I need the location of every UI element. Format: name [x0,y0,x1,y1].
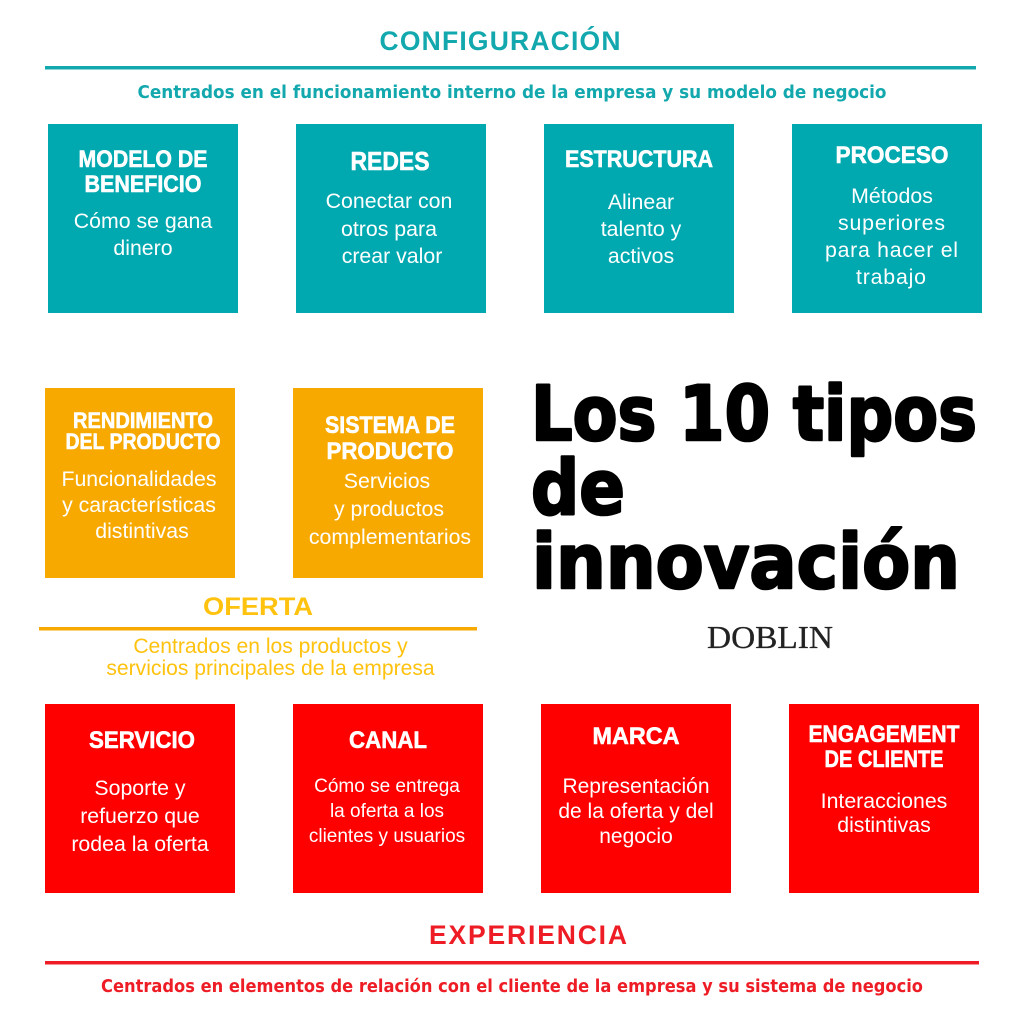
panel: redes: Conectar con [326,189,452,213]
panel: rendimiento del producto: RENDIMIENTO [73,408,213,433]
panel: engagement de cliente: distintivas [837,813,931,837]
panel: canal: CANAL [349,727,427,754]
panel: proceso: para hacer el [825,238,958,262]
panel: sistema de producto: y productos [334,497,444,521]
section heading: experiencia [45,920,979,997]
panel: marca: negocio [599,825,673,848]
panel: proceso: trabajo [856,265,926,289]
section heading: oferta: Centrados en los productos y [133,635,408,658]
section heading: experiencia: EXPERIENCIA [429,920,627,950]
panel: canal: la oferta a los [330,801,444,822]
panel: marca: MARCA [592,723,680,750]
panel: redes [296,124,486,313]
panel: proceso: PROCESO [836,142,948,169]
panel: proceso: superiores [838,211,945,235]
panel: canal [293,704,483,893]
panel: redes: otros para [341,217,437,241]
panel: sistema de producto: Servicios [344,469,430,493]
panel: canal: clientes y usuarios [309,826,465,847]
panel: redes: REDES [350,146,430,176]
section heading: oferta [39,593,477,680]
title [531,369,977,606]
panel: sistema de producto: SISTEMA DE [325,412,455,439]
section heading: configuración [45,26,976,103]
section heading: oferta: servicios principales de la empresa [106,657,435,680]
panel: modelo de beneficio: BENEFICIO [84,171,202,198]
panel: canal: Cómo se entrega [314,776,460,797]
panel: servicio: Soporte y [94,776,186,800]
panel: sistema de producto [293,388,483,578]
panel: engagement de cliente: ENGAGEMENT [808,721,960,748]
panel: estructura: activos [608,244,674,268]
panel: engagement de cliente [789,704,979,893]
panel: modelo de beneficio [48,124,238,313]
panel: sistema de producto: PRODUCTO [326,438,454,465]
panel: servicio: refuerzo que [80,804,200,828]
panel: proceso: Métodos [851,184,933,208]
panel: servicio: rodea la oferta [71,832,209,856]
panel: rendimiento del producto [45,388,235,578]
section heading: oferta: OFERTA [203,593,313,621]
panel: marca: Representación [562,775,710,798]
panel: modelo de beneficio: MODELO DE [78,146,208,173]
panel: servicio: SERVICIO [89,727,195,754]
panel: marca [541,704,731,893]
panel: rendimiento del producto: DEL PRODUCTO [66,429,220,454]
panel: rendimiento del producto: distintivas [95,519,189,543]
panel: redes: crear valor [342,244,442,268]
panel: engagement de cliente: Interacciones [821,789,947,813]
section heading: experiencia: Centrados en elementos de relación con el cliente de la empresa y su sistema de negocio [101,976,923,997]
title: innovación [532,517,960,606]
panel: engagement de cliente: DE CLIENTE [824,746,944,773]
section heading: configuración: CONFIGURACIÓN [380,26,620,56]
panel: marca: de la oferta y del [558,800,714,823]
panel: estructura: ESTRUCTURA [565,146,713,173]
panel: servicio [45,704,235,893]
author: doblin: DOBLIN [707,619,833,655]
panel: modelo de beneficio: dinero [113,236,173,260]
panel: rendimiento del producto: y características [62,493,216,517]
panel: estructura: talento y [601,217,682,241]
panel: proceso [792,124,982,313]
panel: sistema de producto: complementarios [309,525,471,549]
panel: modelo de beneficio: Cómo se gana [74,209,212,233]
section heading: configuración: Centrados en el funcionamiento interno de la empresa y su modelo de negocio [138,82,886,103]
panel: estructura: Alinear [608,190,674,214]
panel: rendimiento del producto: Funcionalidades [61,467,217,491]
panel: estructura [544,124,734,313]
title: de [531,443,625,532]
